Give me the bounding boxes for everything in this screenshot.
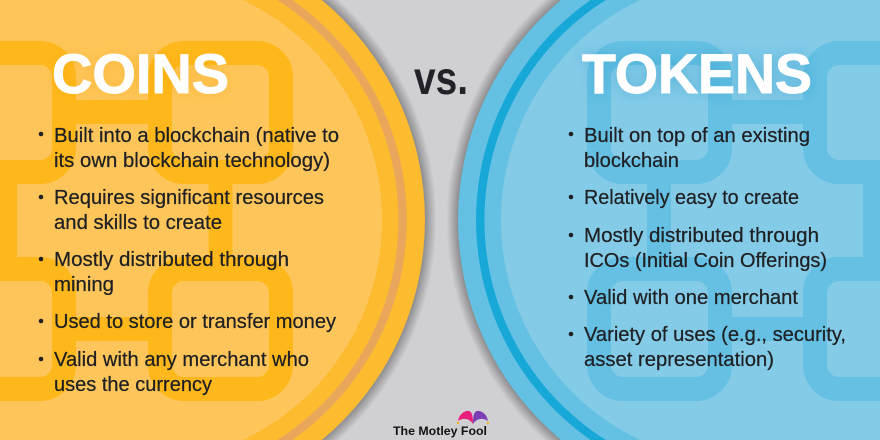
- token ring: [476, 0, 880, 440]
- coin ring: [0, 0, 407, 440]
- vs label: vs.: [414, 52, 468, 104]
- coin bullet list: Mostly distributed through: [54, 249, 289, 271]
- icon: jester hat: [457, 411, 489, 424]
- coin bullet list: Valid with any merchant who: [54, 349, 309, 371]
- coin bullet list: Built into a blockchain (native to: [54, 125, 339, 147]
- token bullet list: Built on top of an existing: [584, 125, 810, 147]
- coin shadow: [0, 0, 436, 440]
- coin bullet list: and skills to create: [54, 212, 222, 234]
- token bullet list: blockchain: [584, 150, 679, 172]
- logo wordmark: The Motley Fool: [393, 424, 487, 438]
- title: tokens: TOKENS: [582, 42, 812, 105]
- title: coins: COINS: [52, 42, 229, 105]
- token bullet list: Mostly distributed through: [584, 225, 819, 247]
- token bullet list: asset representation): [584, 349, 774, 371]
- coin bullet list: Requires significant resources: [54, 187, 324, 209]
- coin bullet list: uses the currency: [54, 374, 212, 396]
- chain pattern: [599, 53, 880, 389]
- coin bullet list: mining: [54, 274, 114, 296]
- coin face: [0, 0, 382, 440]
- logo: The Motley Fool: [393, 411, 489, 438]
- coin bullet list: [39, 125, 339, 396]
- token body: [458, 0, 880, 440]
- panel: tokens: [447, 0, 880, 440]
- coin bullet list: Used to store or transfer money: [54, 311, 336, 333]
- token bullet list: Relatively easy to create: [584, 187, 799, 209]
- title: tokens: TOKENS: [582, 42, 812, 105]
- token face: [501, 0, 880, 440]
- coin inner band: [0, 0, 399, 440]
- coin body: [0, 0, 425, 440]
- title: coins: COINS: [52, 42, 229, 105]
- panel: coins: [0, 0, 436, 440]
- token bullet list: Variety of uses (e.g., security,: [584, 324, 846, 346]
- chain pattern: [0, 53, 281, 389]
- token inner band: [484, 0, 880, 440]
- token bullet list: ICOs (Initial Coin Offerings): [584, 250, 827, 272]
- token bullet list: Valid with one merchant: [584, 287, 798, 309]
- token bullet list: [569, 125, 846, 371]
- coin bullet list: its own blockchain technology): [54, 150, 330, 172]
- token shadow: [447, 0, 880, 440]
